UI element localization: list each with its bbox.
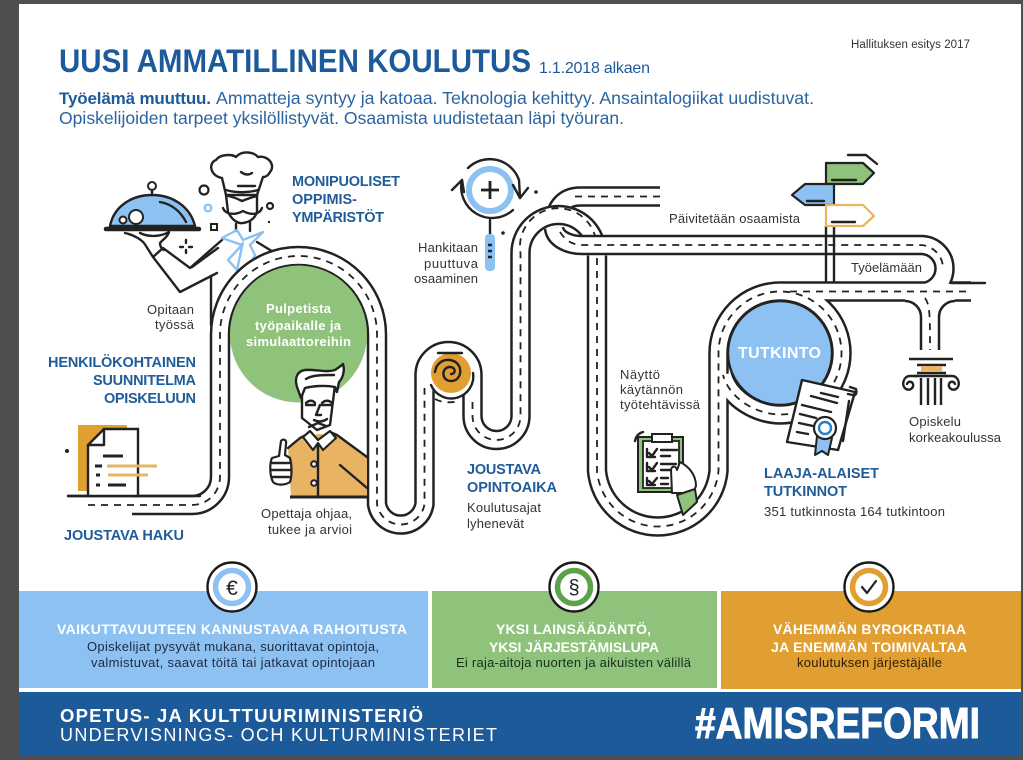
- label: Henkilökohtainen suunnitelma: [48, 354, 197, 407]
- icon: euro badge: [208, 562, 256, 612]
- label: Hankitaan puuttuva osaaminen: Hankitaan: [418, 240, 478, 255]
- label: Hankitaan puuttuva osaaminen: [414, 240, 479, 286]
- road: top branch: [554, 196, 661, 222]
- face: [226, 195, 257, 223]
- label: Hankitaan puuttuva osaaminen: osaaminen: [414, 271, 478, 286]
- circle: Pulpetista: työpaikalle ja: [255, 318, 342, 333]
- label: Henkilökohtainen suunnitelma: SUUNNITELMA: [93, 373, 197, 389]
- icon: magnifier: [452, 159, 538, 271]
- label: Joustava opintoaika: JOUSTAVA: [467, 462, 542, 478]
- label: Joustava haku: JOUSTAVA HAKU: [64, 528, 184, 544]
- panel: byrokratia: [721, 591, 1021, 689]
- label: Hankitaan puuttuva osaaminen: puuttuva: [424, 256, 479, 271]
- icon: paragraph badge: [550, 562, 598, 612]
- source note: Hallituksen esitys 2017: [851, 39, 970, 51]
- icon: teacher: [270, 364, 367, 497]
- label: Henkilökohtainen suunnitelma: OPISKELUUN: [104, 391, 196, 407]
- circle: TUTKINTO: TUTKINTO: [738, 345, 821, 362]
- panel: byrokratia: VÄHEMMÄN BYROKRATIAA: [773, 621, 966, 637]
- footer: OPETUS- JA KULTTUURIMINISTERIÖ: [60, 705, 423, 726]
- label: Opettaja ohjaa: tukee ja arvioi: [268, 522, 352, 537]
- footer: #AMISREFORMI: [695, 699, 980, 748]
- label: Opitaan työssä: työssä: [155, 317, 195, 332]
- panel: rahoitus: valmistuvat, saavat töitä tai jatkavat opintojaan: [91, 655, 375, 670]
- circle: Pulpetista: simulaattoreihin: [246, 334, 351, 349]
- label: Opiskelu korkeakoulussa: Opiskelu: [909, 414, 961, 429]
- icon: chef with cloche: [106, 152, 275, 325]
- cloche: [110, 195, 195, 226]
- intro text: Ammatteja syntyy ja katoaa. Teknologia kehittyy. Ansaintalogiikat uudistuvat.: [216, 88, 814, 108]
- label: Joustava opintoaika: [467, 462, 558, 531]
- label: Opettaja ohjaa: Opettaja ohjaa,: [261, 506, 352, 521]
- icon: paragraph badge: §: [568, 577, 580, 599]
- road: lower network: [554, 228, 985, 526]
- intro text: Työelämä muuttuu.: [59, 89, 211, 108]
- circle: Pulpetista: [230, 266, 367, 402]
- panel: lainsäädäntö: Ei raja-aitoja nuorten ja aikuisten välillä: [456, 655, 692, 670]
- label: Työelämään: Työelämään: [851, 260, 922, 275]
- icon: signpost: [792, 155, 877, 283]
- label: Laaja-alaiset tutkinnot: LAAJA-ALAISET: [764, 466, 879, 482]
- label: Päivitetään osaamista: Päivitetään osaamista: [669, 211, 801, 226]
- circle: Pulpetista: Pulpetista: [266, 301, 332, 316]
- icon: column: [903, 359, 959, 405]
- label: Opettaja ohjaa: [261, 506, 352, 537]
- title: 1.1.2018 alkaen: [539, 60, 650, 77]
- label: Opitaan työssä: [147, 302, 195, 332]
- footer: UNDERVISNINGS- OCH KULTURMINISTERIET: [60, 725, 497, 745]
- label: Monipuoliset oppimisympäristöt: OPPIMIS-: [292, 192, 357, 208]
- intro text: Opiskelijoiden tarpeet yksilöllistyvät. Osaamista uudistetaan läpi työuran.: [59, 108, 624, 128]
- label: Laaja-alaiset tutkinnot: 351 tutkinnosta 164 tutkintoon: [764, 504, 945, 519]
- icon: document: [65, 425, 157, 496]
- panel: lainsäädäntö: YKSI JÄRJESTÄMISLUPA: [489, 639, 659, 655]
- label: Opitaan työssä: Opitaan: [147, 302, 194, 317]
- sparkles: [200, 186, 208, 194]
- label: Henkilökohtainen suunnitelma: HENKILÖKOHTAINEN: [48, 354, 196, 371]
- label: Monipuoliset oppimisympäristöt: MONIPUOLISET: [292, 174, 400, 190]
- panel: lainsäädäntö: YKSI LAINSÄÄDÄNTÖ,: [496, 621, 651, 637]
- label: Monipuoliset oppimisympäristöt: [292, 174, 400, 226]
- label: Näyttö: työtehtävissä: [620, 397, 701, 412]
- footer: [19, 692, 1021, 756]
- panel: byrokratia: JA ENEMMÄN TOIMIVALTAA: [771, 639, 967, 655]
- hat: [211, 152, 272, 195]
- icon: certificate: [787, 380, 856, 455]
- neckerchief: [222, 230, 263, 272]
- label: Monipuoliset oppimisympäristöt: YMPÄRISTÖT: [292, 209, 384, 226]
- label: Näyttö: [620, 367, 701, 412]
- arm: [125, 233, 217, 292]
- label: Laaja-alaiset tutkinnot: [764, 466, 945, 519]
- icon: spiral: [431, 353, 471, 393]
- label: Opiskelu korkeakoulussa: korkeakoulussa: [909, 430, 1002, 445]
- circle: TUTKINTO: [728, 301, 832, 405]
- icon: euro badge: €: [226, 577, 238, 600]
- label: Näyttö: Näyttö: [620, 367, 660, 382]
- panel: rahoitus: [19, 591, 428, 688]
- label: Joustava opintoaika: OPINTOAIKA: [467, 480, 558, 496]
- panel: byrokratia: koulutuksen järjestäjälle: [797, 655, 942, 670]
- icon: check badge: [844, 562, 894, 612]
- road: winding start: [68, 208, 596, 525]
- intro text: [59, 88, 814, 128]
- panel: lainsäädäntö: [432, 591, 717, 688]
- label: Opiskelu korkeakoulussa: [909, 414, 1002, 445]
- title: UUSI AMMATILLINEN KOULUTUS: [59, 43, 531, 79]
- panel: rahoitus: Opiskelijat pysyvät mukana, suorittavat opintoja,: [87, 639, 379, 654]
- label: Joustava opintoaika: Koulutusajat: [467, 500, 541, 515]
- label: Joustava opintoaika: lyhenevät: [467, 516, 524, 531]
- road network: [68, 196, 985, 526]
- panel: rahoitus: VAIKUTTAVUUTEEN KANNUSTAVAA RAHOITUSTA: [57, 621, 407, 637]
- label: Näyttö: käytännön: [620, 382, 683, 397]
- icon: clipboard: [635, 432, 697, 515]
- label: Laaja-alaiset tutkinnot: TUTKINNOT: [764, 484, 847, 500]
